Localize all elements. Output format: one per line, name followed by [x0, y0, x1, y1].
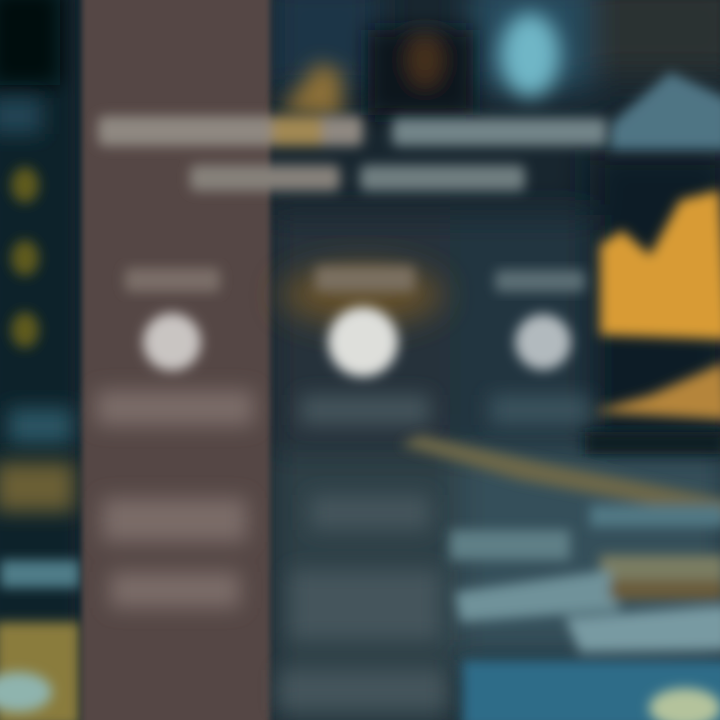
column 1 heading: [125, 268, 220, 292]
column 2 gold glow: [280, 265, 444, 325]
title: [98, 116, 607, 191]
panel: background regions: [270, 0, 720, 720]
chart: orange area large: [600, 190, 720, 340]
icon: column 2 circle: [328, 307, 398, 377]
column 3: [490, 270, 590, 425]
panel: left sidebar: [0, 0, 80, 720]
icon: gold marker 2: [11, 240, 39, 276]
sidebar block: teal: [8, 408, 73, 444]
sidebar block: pale teal: [0, 560, 80, 588]
column 3 text: [490, 395, 590, 425]
icon: column 1 circle: [143, 313, 201, 371]
panel: layered stripes bottom right: [400, 432, 720, 720]
panel: centre top emblem: [368, 30, 473, 115]
column 1: [96, 268, 254, 608]
icon: grey-blue mountain: [610, 72, 720, 150]
icon: gold marker 1: [11, 167, 39, 203]
sidebar block: yellow: [0, 622, 80, 720]
column 1 text: [96, 390, 254, 608]
icon: column 3 circle: [515, 314, 571, 370]
sidebar block: pale oval: [0, 672, 52, 712]
icon: gold marker 3: [11, 312, 39, 348]
chart: orange area small: [590, 362, 720, 420]
panel: brown column: [82, 0, 270, 720]
column 2 text: [280, 395, 445, 710]
icon: pale glow bottom right: [649, 688, 720, 720]
column 2: [280, 265, 445, 710]
sidebar block: gold: [0, 462, 75, 512]
column 2 heading: [315, 266, 415, 292]
icon: gold accent top: [280, 62, 342, 118]
icon: glowing teal shape: [500, 13, 560, 97]
column 3 heading: [495, 270, 585, 292]
